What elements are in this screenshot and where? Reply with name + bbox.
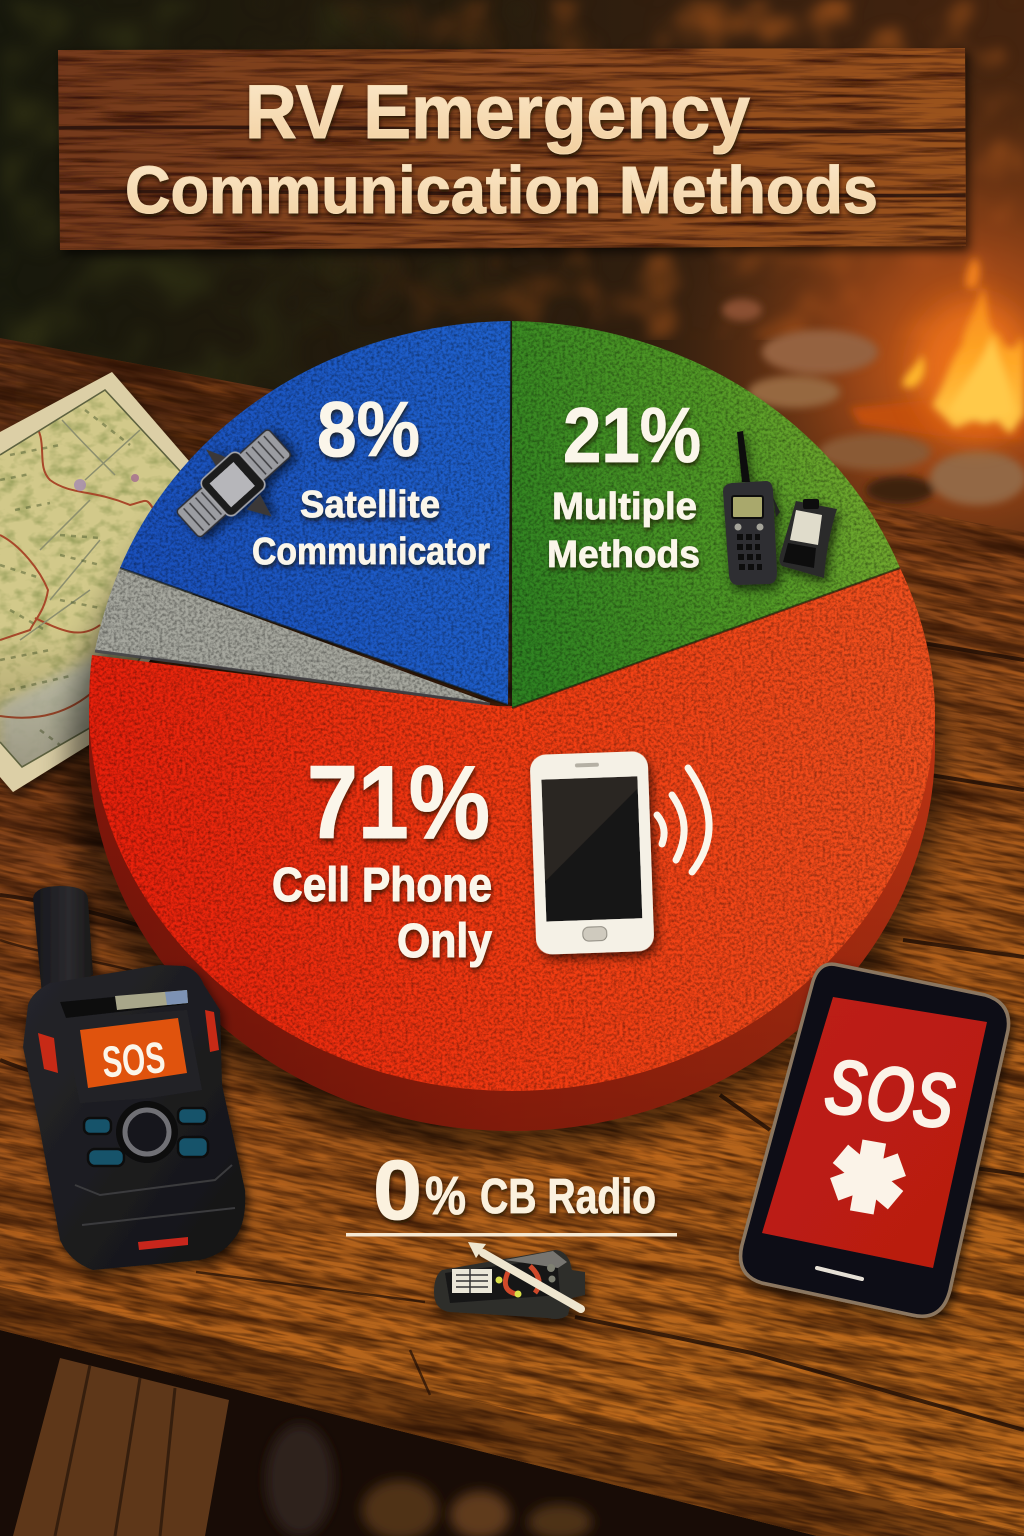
icon: handheld radio and satellite phone: [723, 431, 837, 585]
label: 71% cell phone only: [272, 745, 492, 968]
walkie-talkie with SOS screen: [23, 886, 245, 1270]
under-table shadow area with blurred ground: [0, 1300, 1024, 1536]
wooden table: [0, 330, 1024, 1536]
keypad buttons: [84, 1108, 208, 1166]
title sign: [50, 45, 975, 255]
title text: RV Emergency: [245, 70, 750, 155]
strike-through: [483, 1253, 581, 1309]
antenna: [33, 886, 93, 995]
zero percent CB radio label: [346, 1143, 677, 1319]
label: 21% multiple methods: Methods: [547, 534, 700, 576]
pie side wall: [89, 706, 935, 1131]
phone body: [741, 964, 1009, 1316]
divider line: [346, 1233, 677, 1236]
label text: CB Radio: [480, 1170, 656, 1224]
pie chart: [89, 321, 935, 1131]
SOS text: SOS: [820, 1041, 961, 1147]
folded road map: [0, 372, 192, 800]
top status strip: [60, 990, 188, 1018]
title text: Communication Methods: [125, 153, 878, 228]
label: 8% satellite communicator: [252, 385, 490, 573]
SOS screen: [80, 1018, 187, 1088]
front edge of table: [0, 1287, 1024, 1536]
pie shadow on table: [67, 388, 943, 1152]
label: 21% multiple methods: Multiple: [552, 486, 697, 528]
d-pad: [116, 1101, 178, 1163]
smartphone with SOS screen: [741, 964, 1009, 1316]
icon: satellite: [158, 409, 313, 562]
label: 8% satellite communicator: 8%: [317, 385, 420, 473]
background: dusk forest and campsite: [0, 0, 1024, 560]
icon: crossed-out CB radio: [434, 1242, 585, 1319]
label: 8% satellite communicator: Satellite: [300, 484, 440, 526]
label: 71% cell phone only: Only: [397, 915, 492, 968]
label text: 0: [373, 1143, 422, 1237]
label: 21% multiple methods: 21%: [563, 391, 701, 479]
slice: cell phone only 71%: [89, 568, 935, 1091]
label text: [373, 1143, 656, 1237]
title text: [125, 70, 878, 228]
label: 8% satellite communicator: Communicator: [252, 531, 490, 573]
label: 71% cell phone only: 71%: [307, 745, 490, 861]
pie top slices: [89, 321, 935, 1091]
home indicator: [817, 1268, 862, 1279]
slice: satellite communicator 8%: [120, 321, 511, 705]
red indicator: [138, 1237, 188, 1250]
sign board: [50, 45, 975, 255]
campfire rocks: [722, 299, 1024, 505]
slice: other grey: [95, 568, 490, 703]
label: 21% multiple methods: [547, 391, 701, 576]
SOS screen: SOS: [100, 1033, 167, 1088]
slice: multiple methods 21%: [512, 321, 900, 708]
side grip lights: [38, 1010, 219, 1073]
red screen: [762, 997, 987, 1268]
table leg beam: [13, 1358, 229, 1536]
medical star: [825, 1135, 911, 1219]
label text: %: [425, 1166, 466, 1226]
icon: smartphone with signal waves: [530, 751, 709, 955]
campfire flames and logs: [850, 257, 1024, 440]
radio body: [23, 965, 245, 1270]
label: 71% cell phone only: Cell Phone: [272, 859, 492, 912]
